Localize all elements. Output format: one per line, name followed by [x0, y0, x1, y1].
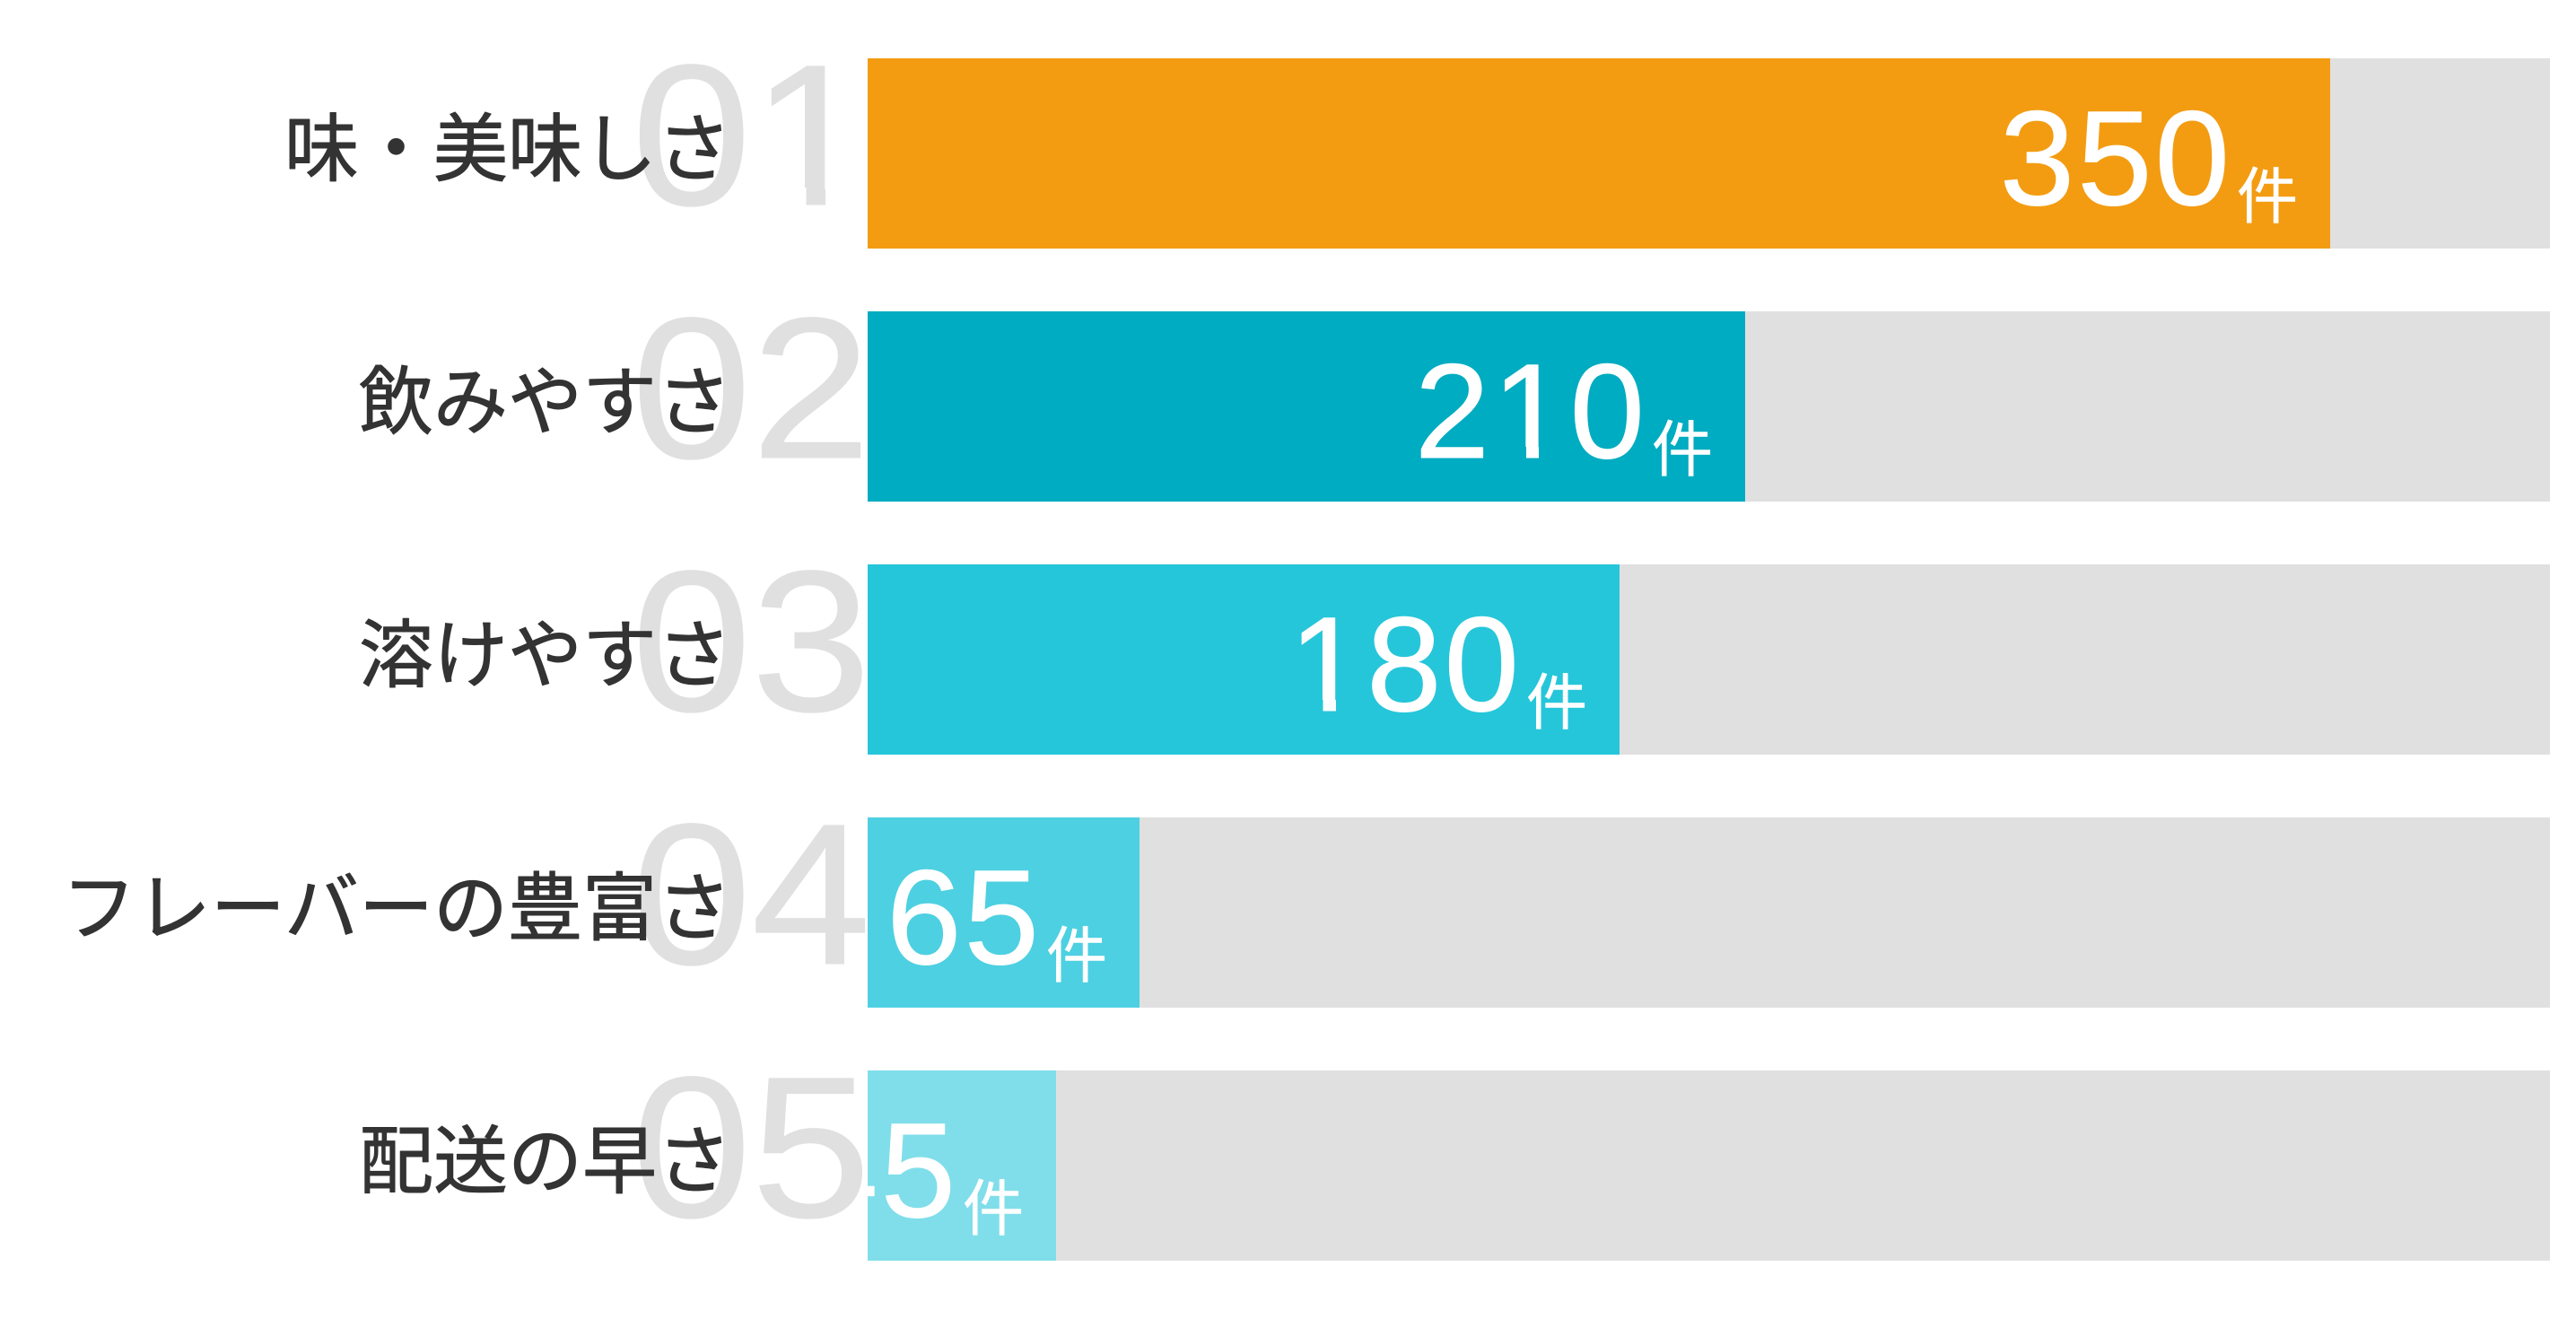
value 210: 件: [1652, 400, 1713, 489]
bar track 02: [868, 311, 2550, 502]
bar track 01: [868, 58, 2550, 249]
value 65: 65: [886, 842, 1042, 992]
label: easy to dissolve: 溶けやすさ: [359, 614, 731, 697]
row 01: taste: [289, 58, 2550, 249]
bar track 04: [868, 817, 2550, 1008]
row 03: easy to dissolve: [361, 564, 2550, 755]
bar track 05: [868, 1070, 2550, 1261]
value 45, clipped by its bar: 件: [963, 1159, 1024, 1248]
bar fill 65: [868, 817, 1140, 1008]
bar fill 350: [868, 58, 2330, 249]
rank number 03: 03: [632, 529, 871, 754]
rank number 04: 04: [632, 782, 871, 1007]
rank number 01: 01: [632, 23, 871, 248]
value 45, clipped by its bar: 45: [803, 1095, 958, 1245]
label: delivery speed: 配送の早さ: [359, 1120, 731, 1203]
value 180: 件: [1526, 653, 1587, 742]
value 350: 350: [2000, 83, 2232, 233]
row 02: easy to drink: [360, 311, 2550, 502]
row 04: flavor variety: [72, 817, 2550, 1008]
bar fill 210: [868, 311, 1745, 502]
row 05: delivery speed: [362, 1070, 2550, 1261]
value 210: 210: [1415, 336, 1647, 486]
rank number 05: 05: [632, 1035, 871, 1260]
bar fill 180: [868, 564, 1620, 755]
bar fill 45: [868, 1070, 1056, 1261]
value 350: 件: [2237, 147, 2298, 236]
label: easy to drink: 飲みやすさ: [359, 361, 731, 444]
value 65: 件: [1046, 906, 1107, 995]
bar track 03: [868, 564, 2550, 755]
rank number 02: 02: [632, 276, 871, 501]
label: taste: 味・美味しさ: [284, 108, 731, 191]
label: flavor variety: フレーバーの豊富さ: [62, 867, 731, 950]
value 180: 180: [1289, 589, 1522, 739]
